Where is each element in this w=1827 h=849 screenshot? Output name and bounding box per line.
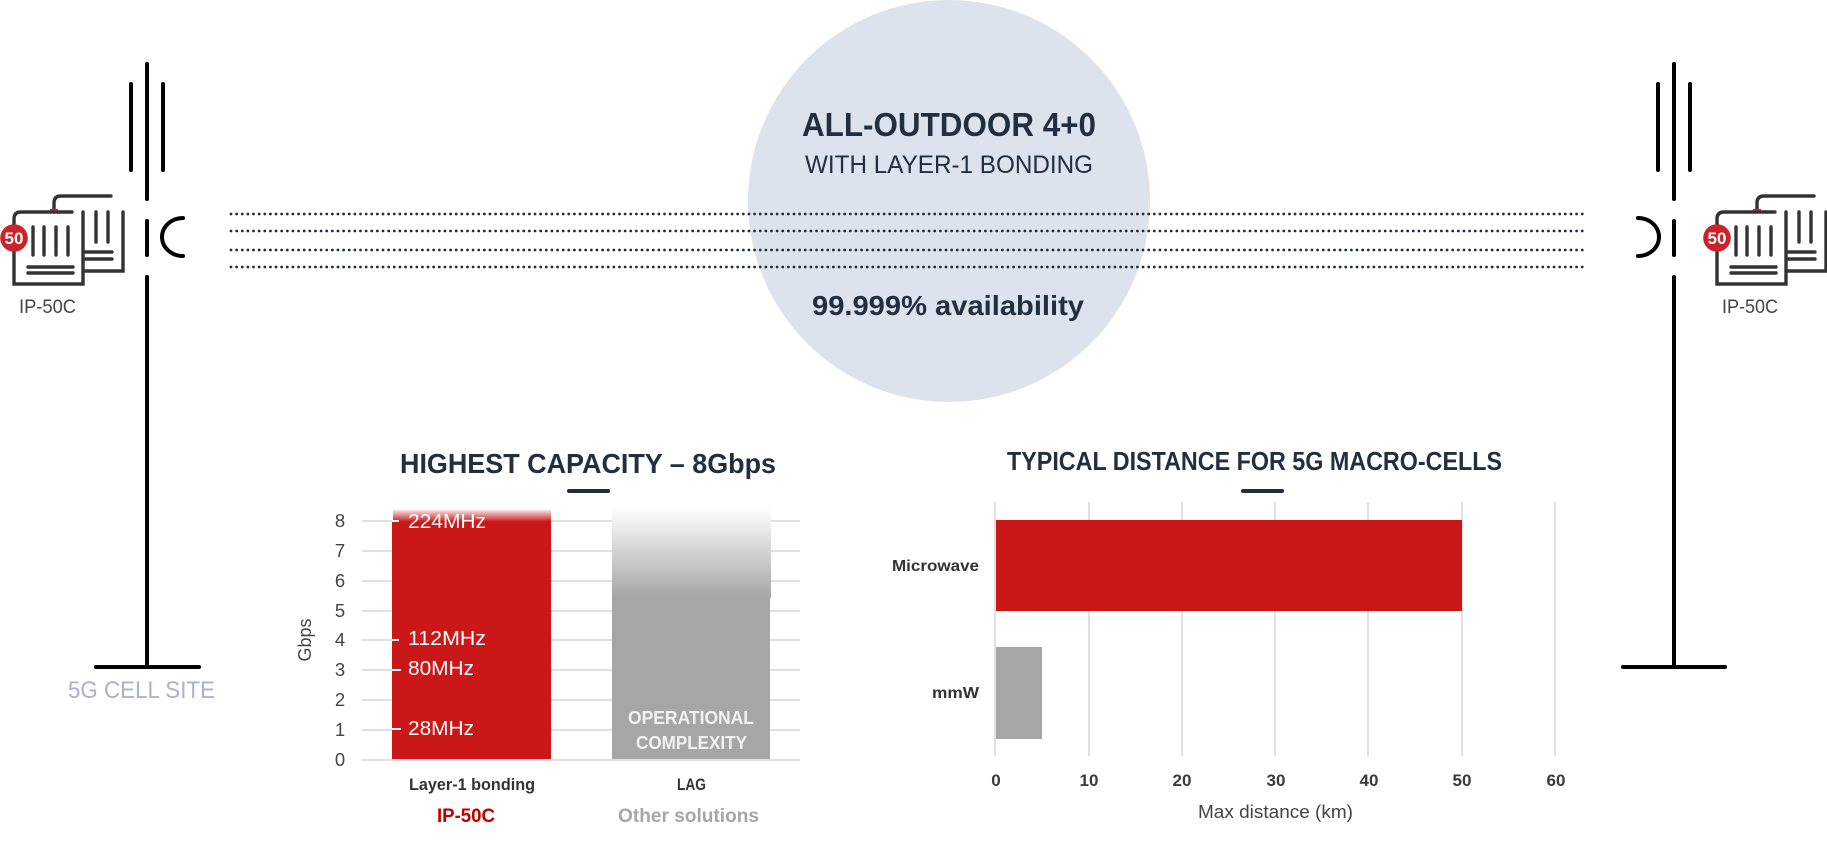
circle heading: all-outdoor 4+0: ALL-OUTDOOR 4+0 xyxy=(802,106,1096,143)
bar chart: capacity in Gbps: 4 xyxy=(335,629,345,650)
bar chart: capacity in Gbps: Layer-1 bonding xyxy=(409,775,535,794)
availability text: 99.999% availability xyxy=(812,290,1084,321)
bar chart: max distance in km: mmW xyxy=(932,685,980,702)
left site label: 5G CELL SITE xyxy=(68,677,215,704)
left device label: IP-50C xyxy=(19,296,76,318)
right tower xyxy=(1623,64,1725,667)
bar chart: max distance in km: 10 xyxy=(1080,771,1098,790)
bar chart: max distance in km: 20 xyxy=(1173,771,1191,790)
bar chart: capacity in Gbps: IP-50C xyxy=(437,806,495,827)
left device: IP-50C pair: 50 xyxy=(5,229,23,248)
dotted radio links xyxy=(231,214,1584,267)
bar chart: capacity in Gbps: 6 xyxy=(335,570,345,591)
distance heading underline xyxy=(1241,489,1284,493)
bar chart: capacity in Gbps: 7 xyxy=(335,540,345,561)
bar chart: capacity in Gbps: LAG xyxy=(677,775,706,794)
left tower xyxy=(96,64,199,667)
bar chart: capacity in Gbps: 3 xyxy=(335,659,345,680)
bar chart: max distance in km xyxy=(892,502,1565,822)
bar chart: capacity in Gbps xyxy=(294,507,800,827)
bar chart: capacity in Gbps: 1 xyxy=(335,719,345,740)
bar chart: max distance in km: 30 xyxy=(1267,771,1285,790)
bar chart: max distance in km: 50 xyxy=(1453,771,1471,790)
distance chart heading: TYPICAL DISTANCE FOR 5G MACRO-CELLS xyxy=(1007,448,1502,476)
bar chart: capacity in Gbps: Gbps xyxy=(294,618,315,662)
bar chart: capacity in Gbps: Other solutions xyxy=(618,806,759,827)
left device: IP-50C pair xyxy=(0,196,123,284)
bar chart: capacity in Gbps: 2 xyxy=(335,689,345,710)
bar chart: capacity in Gbps: 5 xyxy=(335,600,345,621)
bar chart: capacity in Gbps: 28MHz xyxy=(408,718,474,740)
right device: IP-50C pair xyxy=(1703,196,1826,284)
bar chart: capacity in Gbps: 224MHz xyxy=(408,511,486,533)
bar chart: max distance in km: 0 xyxy=(991,771,1001,790)
bar chart: capacity in Gbps: COMPLEXITY xyxy=(636,733,747,753)
bar chart: capacity in Gbps: 8 xyxy=(335,510,345,531)
bar chart: capacity in Gbps: OPERATIONAL xyxy=(628,708,754,728)
right device label: IP-50C xyxy=(1722,296,1778,318)
right device: IP-50C pair: 50 xyxy=(1708,229,1726,248)
bar chart: max distance in km: 40 xyxy=(1360,771,1378,790)
bar chart: capacity in Gbps: 80MHz xyxy=(408,658,474,680)
bar chart: capacity in Gbps: 112MHz xyxy=(408,628,486,650)
central circle: all-outdoor 4+0 xyxy=(748,0,1150,402)
bar chart: capacity in Gbps: 0 xyxy=(335,749,345,770)
capacity heading underline xyxy=(567,489,610,493)
circle subheading: with layer-1 bonding: WITH LAYER-1 BONDING xyxy=(805,151,1093,179)
bar chart: max distance in km: 60 xyxy=(1547,771,1565,790)
bar chart: max distance in km: Max distance (km) xyxy=(1198,802,1353,822)
capacity chart heading: HIGHEST CAPACITY – 8Gbps xyxy=(400,448,776,479)
bar chart: max distance in km: Microwave xyxy=(892,558,979,575)
